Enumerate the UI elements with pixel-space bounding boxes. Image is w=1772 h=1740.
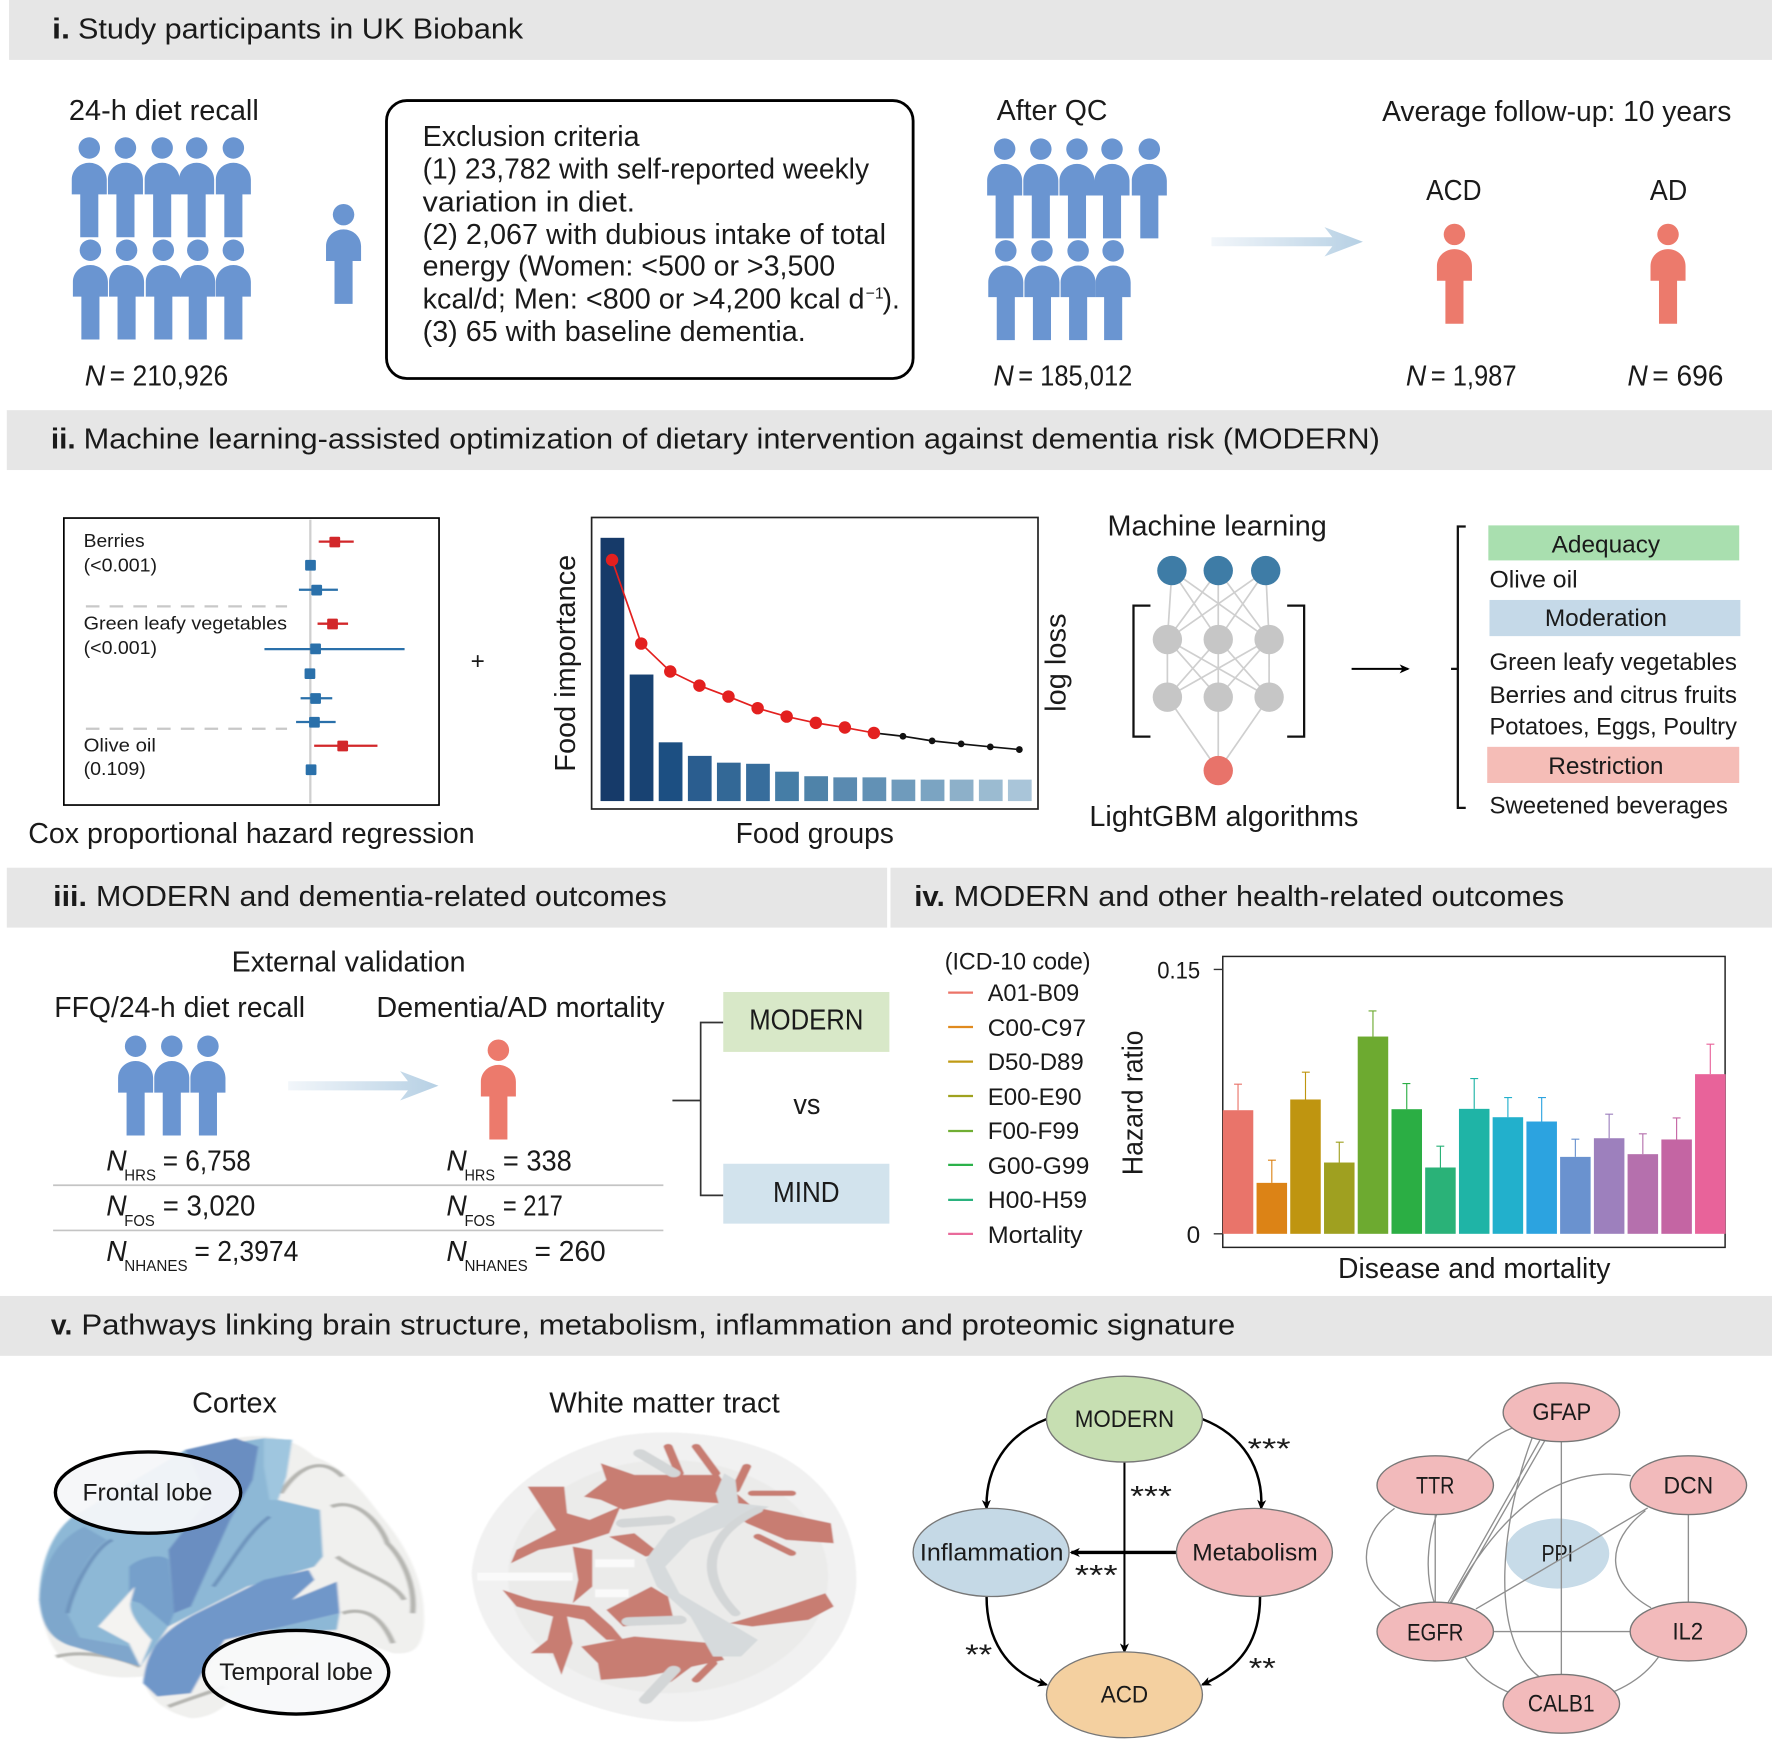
heading: section iv xyxy=(891,868,1772,928)
icon: validation cohort people xyxy=(118,1036,225,1136)
node: EGFR xyxy=(1377,1602,1493,1661)
axis label: disease and mortality: Disease and mortality xyxy=(1338,1252,1611,1284)
label: white matter tract: White matter tract xyxy=(549,1386,780,1418)
icon: group of ten participants xyxy=(72,137,251,340)
block: MIND xyxy=(723,1164,889,1224)
block: adequacy xyxy=(1488,525,1739,560)
node: PPI xyxy=(1505,1519,1609,1589)
label: N 1,987: N xyxy=(1406,359,1427,391)
legend: ICD-10 codes: H00-H59 xyxy=(988,1187,1087,1214)
icon: mortality case xyxy=(481,1039,516,1139)
table: cohort sizes: N xyxy=(446,1235,467,1267)
label: temporal lobe ellipse: Temporal lobe xyxy=(219,1659,373,1686)
symbol: plus: + xyxy=(471,648,485,675)
callout: exclusion criteria box: (3) 65 with baseline dementia. xyxy=(423,315,806,347)
heading: section i: Study participants in UK Biobank xyxy=(78,12,524,44)
chart: hazard ratio bars: 0 xyxy=(1187,1222,1200,1249)
label: N 696: = 696 xyxy=(1652,359,1723,391)
node: inflammation: Inflammation xyxy=(920,1539,1063,1566)
chart: Cox forest plot: (0.109) xyxy=(84,758,146,779)
table: cohort sizes: = 2,3974 xyxy=(194,1235,298,1267)
label: N 210,926: N xyxy=(85,359,106,391)
arrow: to dietary recommendations xyxy=(1352,668,1408,670)
heading: section v: v. xyxy=(51,1308,72,1340)
legend: ICD-10 codes xyxy=(945,948,1091,1249)
legend: ICD-10 codes: F00-F99 xyxy=(988,1118,1079,1145)
text: moderation foods xyxy=(1489,649,1738,740)
text: olive oil: Olive oil xyxy=(1489,567,1578,594)
callout: exclusion criteria box: kcal/d; Men: <800 or >4,200 kcal d xyxy=(423,282,865,314)
arrow: to follow-up xyxy=(1211,227,1363,256)
heading: section i xyxy=(9,0,1772,60)
node: metabolism xyxy=(1176,1508,1332,1597)
label: ACD: ACD xyxy=(1426,174,1482,206)
node: metabolism: Metabolism xyxy=(1192,1539,1318,1566)
heading: section iii: iii. xyxy=(53,880,87,912)
panel: section iv health-related outcomes xyxy=(891,868,1772,1284)
callout: exclusion criteria box: Exclusion criteria xyxy=(423,120,640,152)
label: N 1,987: = 1,987 xyxy=(1431,359,1517,391)
label: dementia mortality: Dementia/AD mortality xyxy=(376,991,665,1023)
block: restriction: Restriction xyxy=(1548,753,1664,780)
diagram: mediation pathways xyxy=(913,1376,1332,1738)
node: CALB1: CALB1 xyxy=(1528,1691,1595,1718)
callout: exclusion criteria box xyxy=(386,101,913,379)
table: cohort sizes: = 217 xyxy=(503,1190,563,1222)
label: N 185,012: = 185,012 xyxy=(1018,359,1132,391)
table: cohort sizes: HRS xyxy=(124,1168,156,1185)
diagram: protein interaction network xyxy=(1366,1383,1747,1733)
table: cohort sizes: N xyxy=(106,1235,127,1267)
node: ACD: ACD xyxy=(1101,1682,1148,1709)
node: PPI: PPI xyxy=(1541,1540,1573,1567)
callout: exclusion criteria box: variation in diet. xyxy=(423,185,635,217)
text: vs: vs xyxy=(793,1088,820,1120)
illustration: white matter tract brain xyxy=(472,1432,856,1722)
bracket: recommendations xyxy=(1451,527,1466,808)
chart: Cox forest plot: (<0.001) xyxy=(84,555,157,576)
label: Cox regression: Cox proportional hazard regression xyxy=(28,817,475,849)
panel: section v pathways xyxy=(0,1296,1772,1738)
table: cohort sizes: FOS xyxy=(464,1213,495,1230)
legend: ICD-10 codes: A01-B09 xyxy=(988,980,1079,1007)
icon: excluded participant xyxy=(326,204,361,304)
legend: ICD-10 codes: E00-E90 xyxy=(988,1084,1082,1111)
node: GFAP: GFAP xyxy=(1532,1399,1591,1426)
significance stars: *** xyxy=(1075,1559,1118,1591)
table: cohort sizes: FOS xyxy=(124,1213,155,1230)
legend: ICD-10 codes: Mortality xyxy=(988,1222,1084,1249)
axis label: hazard ratio: Hazard ratio xyxy=(1117,1030,1149,1175)
table: cohort sizes: HRS xyxy=(464,1168,495,1185)
table: cohort sizes xyxy=(53,1145,663,1275)
label: FFQ recall: FFQ/24-h diet recall xyxy=(54,991,305,1023)
icon: AD case xyxy=(1651,224,1686,324)
axis label: log loss: log loss xyxy=(1040,614,1072,712)
block: MODERN xyxy=(723,992,889,1052)
diagram: neural network xyxy=(1133,556,1304,785)
text: sweetened beverages: Sweetened beverages xyxy=(1489,793,1728,820)
node: IL2 xyxy=(1630,1602,1747,1661)
legend: ICD-10 codes: C00-C97 xyxy=(988,1015,1086,1042)
icon: ACD case xyxy=(1437,224,1472,324)
heading: section ii: Machine learning-assisted optimization of dietary intervention against dementia risk (MODERN) xyxy=(84,423,1380,455)
heading: section v xyxy=(0,1296,1772,1356)
callout: exclusion criteria box: (2) 2,067 with dubious intake of total xyxy=(423,218,886,250)
text: moderation foods: Green leafy vegetables xyxy=(1489,649,1737,676)
table: cohort sizes: N xyxy=(446,1190,467,1222)
heading: section i: i. xyxy=(52,12,70,44)
label: LightGBM algorithms: LightGBM algorithms xyxy=(1089,800,1358,832)
significance stars: ** xyxy=(1249,1652,1276,1684)
chart: Cox forest plot: (<0.001) xyxy=(84,637,157,658)
table: cohort sizes: N xyxy=(106,1145,127,1177)
table: cohort sizes: = 6,758 xyxy=(163,1145,251,1177)
chart: Cox forest plot: Green leafy vegetables xyxy=(84,612,287,633)
node: MODERN xyxy=(1046,1376,1202,1462)
node: ACD xyxy=(1046,1652,1202,1738)
label: N 210,926: = 210,926 xyxy=(110,359,228,391)
callout: exclusion criteria box: energy (Women: <500 or >3,500 xyxy=(423,250,835,282)
significance stars xyxy=(965,1433,1291,1684)
legend: ICD-10 codes: D50-D89 xyxy=(988,1049,1084,1076)
panel: section ii machine learning optimization xyxy=(7,410,1772,849)
label: frontal lobe ellipse: Frontal lobe xyxy=(82,1479,212,1506)
heading: section ii xyxy=(7,410,1772,470)
node: DCN xyxy=(1630,1456,1747,1515)
node: GFAP xyxy=(1503,1383,1620,1442)
heading: section iv: MODERN and other health-related outcomes xyxy=(954,880,1564,912)
node: EGFR: EGFR xyxy=(1407,1620,1463,1647)
legend: ICD-10 codes: (ICD-10 code) xyxy=(945,948,1091,975)
label: average follow-up: Average follow-up: 10 years xyxy=(1382,95,1731,127)
illustration: cortex brain xyxy=(39,1436,424,1718)
callout: exclusion criteria box: ). xyxy=(883,282,900,314)
block: moderation: Moderation xyxy=(1545,605,1667,632)
heading: section iv: iv. xyxy=(914,880,945,912)
label: cortex: Cortex xyxy=(192,1386,277,1418)
block: MODERN: MODERN xyxy=(749,1003,863,1035)
bracket: comparison xyxy=(672,1023,723,1195)
node: TTR: TTR xyxy=(1416,1473,1454,1500)
label: 24-h diet recall: 24-h diet recall xyxy=(69,94,259,126)
table: cohort sizes: N xyxy=(106,1190,127,1222)
node: TTR xyxy=(1377,1456,1493,1515)
significance stars: *** xyxy=(1248,1433,1291,1465)
text: moderation foods: Potatoes, Eggs, Poultry xyxy=(1489,713,1738,740)
label: machine learning: Machine learning xyxy=(1108,510,1327,542)
axis label: food importance: Food importance xyxy=(549,555,581,772)
heading: section v: Pathways linking brain structure, metabolism, inflammation and proteomic signature xyxy=(81,1308,1235,1340)
table: cohort sizes: N xyxy=(446,1145,467,1177)
significance stars: *** xyxy=(1130,1480,1172,1512)
chart: hazard ratio bars: 0.15 xyxy=(1157,957,1200,984)
icon: participants after QC xyxy=(987,138,1167,340)
chart: hazard ratio bars xyxy=(1157,956,1726,1249)
table: cohort sizes: = 260 xyxy=(535,1235,606,1267)
panel: section iii dementia-related outcomes xyxy=(7,868,889,1275)
text: moderation foods: Berries and citrus fruits xyxy=(1489,682,1737,709)
label: N 696: N xyxy=(1627,359,1648,391)
block: restriction xyxy=(1487,747,1739,783)
heading: section iii: MODERN and dementia-related outcomes xyxy=(96,880,667,912)
block: adequacy: Adequacy xyxy=(1552,532,1661,559)
label: after QC: After QC xyxy=(997,94,1108,126)
legend: ICD-10 codes: G00-G99 xyxy=(988,1153,1089,1180)
node: IL2: IL2 xyxy=(1673,1618,1703,1645)
label: temporal lobe ellipse xyxy=(203,1630,389,1714)
chart: Cox forest plot: Berries xyxy=(84,530,145,551)
node: CALB1 xyxy=(1503,1674,1620,1733)
node: inflammation xyxy=(913,1508,1069,1597)
chart: food importance bars and log loss curve xyxy=(592,517,1038,809)
chart: Cox forest plot xyxy=(64,518,439,805)
block: moderation xyxy=(1489,600,1740,636)
label: N 185,012: N xyxy=(993,359,1014,391)
node: MODERN: MODERN xyxy=(1075,1406,1174,1433)
heading: section ii: ii. xyxy=(51,423,76,455)
heading: section iii xyxy=(7,868,887,928)
significance stars: ** xyxy=(965,1638,992,1670)
table: cohort sizes: = 3,020 xyxy=(163,1190,255,1222)
callout: exclusion criteria box: (1) 23,782 with self-reported weekly xyxy=(423,153,870,185)
table: cohort sizes: NHANES xyxy=(464,1258,528,1275)
axis label: food groups: Food groups xyxy=(736,817,894,849)
table: cohort sizes: = 338 xyxy=(503,1145,572,1177)
node: DCN: DCN xyxy=(1664,1473,1713,1500)
label: frontal lobe ellipse xyxy=(55,1452,241,1533)
panel: section i study participants xyxy=(9,0,1772,391)
label: external validation: External validation xyxy=(232,946,466,978)
block: MIND: MIND xyxy=(773,1176,840,1208)
table: cohort sizes: NHANES xyxy=(124,1258,188,1275)
chart: Cox forest plot: Olive oil xyxy=(84,734,156,755)
label: AD: AD xyxy=(1650,174,1687,206)
arrow: cohort to mortality xyxy=(288,1071,438,1100)
callout: exclusion criteria box: −1 xyxy=(866,285,884,302)
